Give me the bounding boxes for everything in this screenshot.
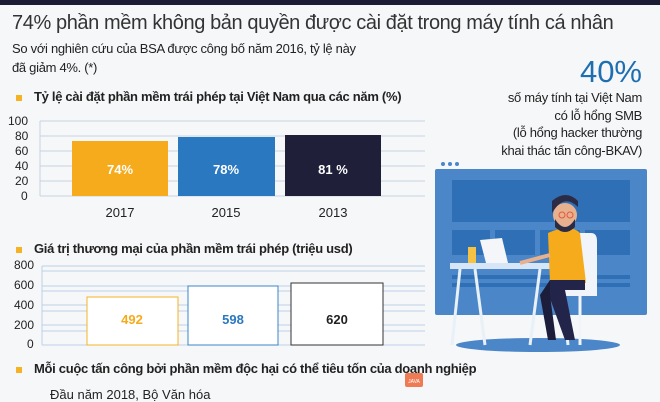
bar chart: value: 800 bbox=[14, 258, 34, 272]
stat: 40%: (lỗ hổng hacker thường bbox=[513, 125, 642, 140]
bar chart: percentage: 78% bbox=[213, 162, 239, 177]
bar chart: value: 400 bbox=[14, 298, 34, 312]
bar chart: value: 620 bbox=[326, 312, 348, 327]
stat: 40% bbox=[501, 54, 642, 158]
heading: section 3: Mỗi cuộc tấn công bởi phần mềm độc hại có thể tiêu tốn của doanh nghiệp bbox=[34, 361, 476, 376]
illustration: hacker at desk: JAVA bbox=[408, 379, 421, 385]
stat: 40%: số máy tính tại Việt Nam bbox=[508, 90, 642, 105]
bar chart: value: 598 bbox=[222, 312, 244, 327]
desk bbox=[450, 263, 580, 269]
java icon bbox=[405, 373, 423, 387]
bar chart: value: 600 bbox=[14, 278, 34, 292]
bar chart: percentage: 2013 bbox=[319, 205, 347, 220]
bar chart: value: 200 bbox=[14, 318, 34, 332]
bar chart: percentage: 100 bbox=[8, 114, 28, 128]
bar chart: percentage: 74% bbox=[107, 162, 133, 177]
stat: 40%: khai thác tấn công-BKAV) bbox=[501, 142, 642, 158]
bar chart: percentage: 40 bbox=[15, 159, 29, 173]
top bar bbox=[0, 0, 660, 5]
bar chart: percentage: 2015 bbox=[212, 205, 240, 220]
bar chart: value: 492 bbox=[121, 312, 143, 327]
bar chart: value bbox=[14, 258, 425, 350]
title: 74% phần mềm không bản quyền được cài đặt trong máy tính cá nhân bbox=[12, 12, 613, 34]
person bbox=[548, 228, 586, 283]
stat: 40%: có lỗ hổng SMB bbox=[554, 108, 642, 122]
stat: 40%: 40% bbox=[580, 54, 642, 89]
bar chart: percentage: 60 bbox=[15, 144, 29, 158]
subtitle bbox=[12, 41, 356, 75]
chair bbox=[557, 233, 597, 296]
text: clipped paragraph: Đầu năm 2018, Bộ Văn hóa bbox=[50, 387, 210, 402]
heading: chart 1: Tỷ lệ cài đặt phần mềm trái phép tại Việt Nam qua các năm (%) bbox=[34, 89, 401, 104]
bar chart: percentage: 0 bbox=[21, 189, 28, 203]
bar chart: percentage: 80 bbox=[15, 129, 29, 143]
bar chart: percentage: 20 bbox=[15, 174, 29, 188]
illustration: hacker at desk bbox=[405, 162, 647, 387]
bar chart: percentage: 2017 bbox=[106, 205, 134, 220]
subtitle: đã giảm 4%. (*) bbox=[12, 60, 97, 75]
bar chart: percentage: 81 % bbox=[318, 162, 348, 177]
heading: chart 2: Giá trị thương mại của phần mềm trái phép (triệu usd) bbox=[34, 241, 352, 256]
bar chart: percentage bbox=[8, 114, 425, 220]
subtitle: So với nghiên cứu của BSA được công bố năm 2016, tỷ lệ này bbox=[12, 41, 356, 56]
